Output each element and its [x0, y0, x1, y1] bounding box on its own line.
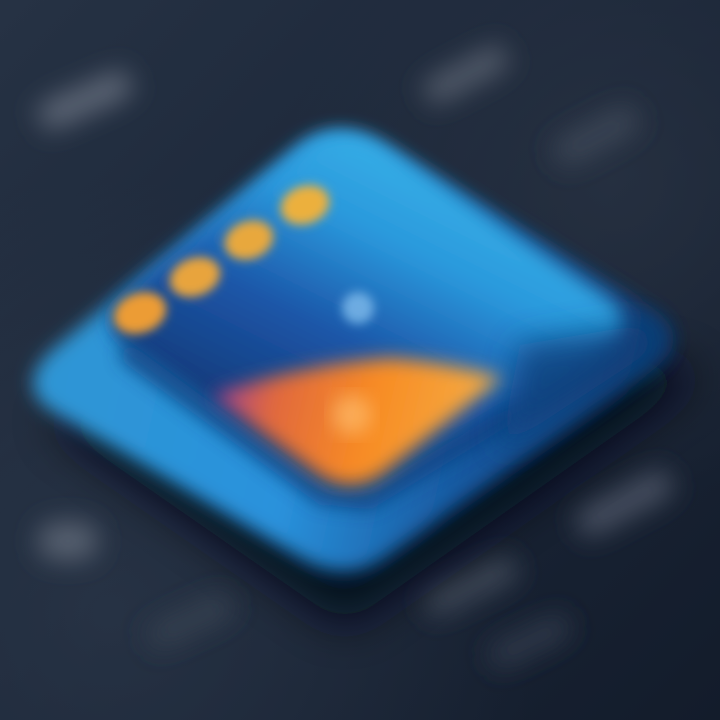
label: top left [34, 67, 136, 133]
label: bottom left [143, 589, 238, 652]
label: upper right [549, 101, 644, 171]
label: lower left [38, 522, 98, 560]
label: bottom right [484, 610, 575, 672]
dark lower right band [500, 325, 660, 450]
card upper layer [110, 133, 660, 510]
orange panel [212, 358, 502, 485]
label: bottom center [420, 552, 521, 620]
center chip glow [342, 292, 374, 324]
card base layer [33, 132, 674, 572]
dark band between layers [120, 340, 520, 510]
label: top right [419, 41, 513, 108]
four orange dots [108, 179, 335, 341]
label: lower right [571, 465, 678, 541]
blurred labels around the card [34, 41, 678, 672]
orange highlight [332, 395, 372, 435]
card shadow [50, 300, 700, 625]
